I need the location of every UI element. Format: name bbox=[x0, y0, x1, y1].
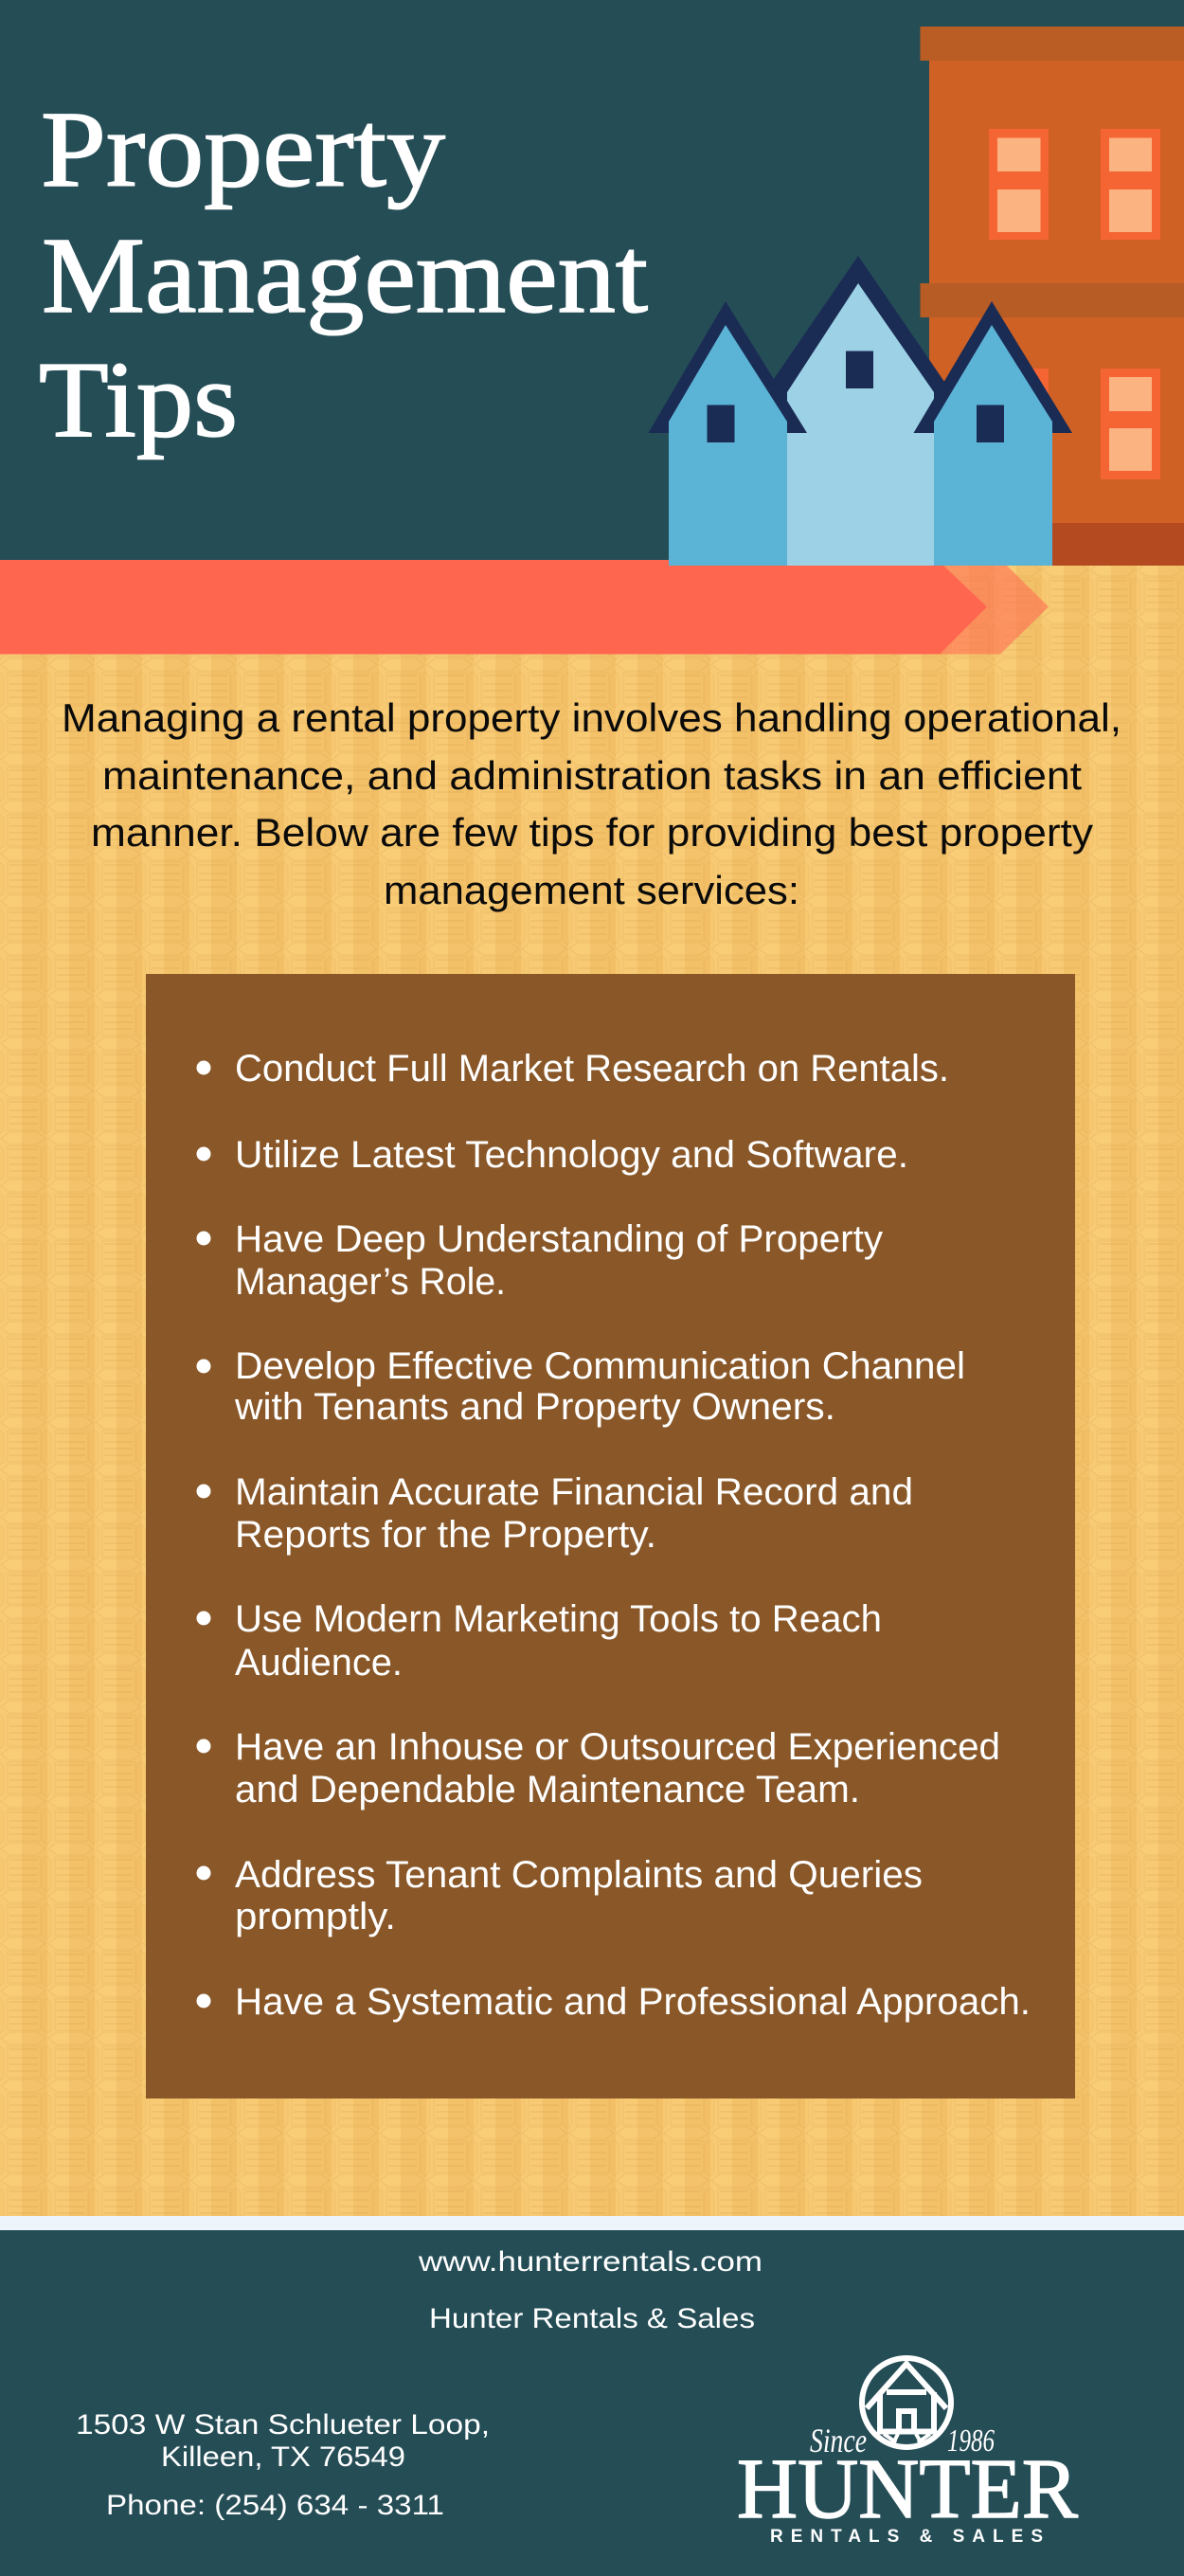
title: Management bbox=[42, 215, 648, 335]
icon: right house bbox=[913, 301, 1072, 566]
title: Tips bbox=[39, 339, 238, 459]
patterned background bbox=[0, 566, 1184, 2216]
logo emblem bbox=[862, 2358, 951, 2447]
logo tagline: RENTALS & SALES bbox=[770, 2527, 1043, 2547]
title bbox=[39, 89, 648, 459]
footer address bbox=[76, 2409, 490, 2473]
tip 6: Use Modern Marketing Tools to Reach bbox=[235, 1598, 882, 1640]
title: Property bbox=[41, 89, 445, 209]
tip 5: Maintain Accurate Financial Record and bbox=[235, 1471, 913, 1513]
intro paragraph: management services: bbox=[384, 868, 799, 912]
tip 2: Utilize Latest Technology and Software. bbox=[235, 1134, 908, 1176]
intro paragraph: manner. Below are few tips for providing best property bbox=[91, 810, 1093, 855]
tip 5: Reports for the Property. bbox=[235, 1514, 656, 1556]
icon: left house bbox=[648, 301, 807, 566]
header background bbox=[0, 0, 1184, 566]
panel: tips list bbox=[146, 974, 1075, 2099]
tip 4: Develop Effective Communication Channel bbox=[235, 1345, 965, 1387]
tip 3: Have Deep Understanding of Property bbox=[235, 1218, 883, 1260]
footer website: www.hunterrentals.com bbox=[418, 2246, 762, 2278]
arrow: ghost chevron bbox=[852, 566, 1049, 654]
intro paragraph: Managing a rental property involves handling operational, bbox=[62, 695, 1121, 740]
tip 8 bbox=[197, 1854, 923, 1937]
footer company name: Hunter Rentals & Sales bbox=[429, 2303, 755, 2334]
arrow: coral banner bbox=[0, 560, 987, 654]
intro paragraph bbox=[62, 695, 1121, 912]
footer address: Killeen, TX 76549 bbox=[161, 2441, 405, 2473]
tip 7: Have an Inhouse or Outsourced Experienced bbox=[235, 1726, 1000, 1768]
logo year: 1986 bbox=[947, 2423, 995, 2459]
tip 1: Conduct Full Market Research on Rentals. bbox=[235, 1048, 949, 1090]
footer divider strip bbox=[0, 2216, 1184, 2230]
tip 6: Audience. bbox=[235, 1642, 403, 1684]
footer phone: Phone: (254) 634 - 3311 bbox=[106, 2490, 444, 2521]
tip 4 bbox=[197, 1345, 965, 1428]
icon: apartment building bbox=[921, 27, 1184, 566]
tip 6 bbox=[197, 1598, 882, 1684]
tip 4: with Tenants and Property Owners. bbox=[234, 1386, 835, 1428]
footer address: 1503 W Stan Schlueter Loop, bbox=[76, 2409, 490, 2441]
logo since: Since bbox=[810, 2422, 867, 2459]
tip 9: Have a Systematic and Professional Approach. bbox=[235, 1981, 1031, 2023]
logo: Hunter Rentals & Sales bbox=[737, 2358, 1078, 2547]
tip 7 bbox=[197, 1726, 1000, 1810]
footer band bbox=[0, 2230, 1184, 2576]
tip 3: Manager’s Role. bbox=[235, 1261, 506, 1303]
tip 8: promptly. bbox=[235, 1896, 396, 1937]
tip 7: and Dependable Maintenance Team. bbox=[235, 1769, 860, 1810]
tip 5 bbox=[197, 1471, 913, 1556]
tip 3 bbox=[197, 1218, 883, 1303]
icon: centre house bbox=[737, 256, 979, 566]
intro paragraph: maintenance, and administration tasks in an efficient bbox=[102, 753, 1082, 798]
logo wordmark: HUNTER bbox=[737, 2442, 1078, 2536]
tip 8: Address Tenant Complaints and Queries bbox=[235, 1854, 923, 1896]
